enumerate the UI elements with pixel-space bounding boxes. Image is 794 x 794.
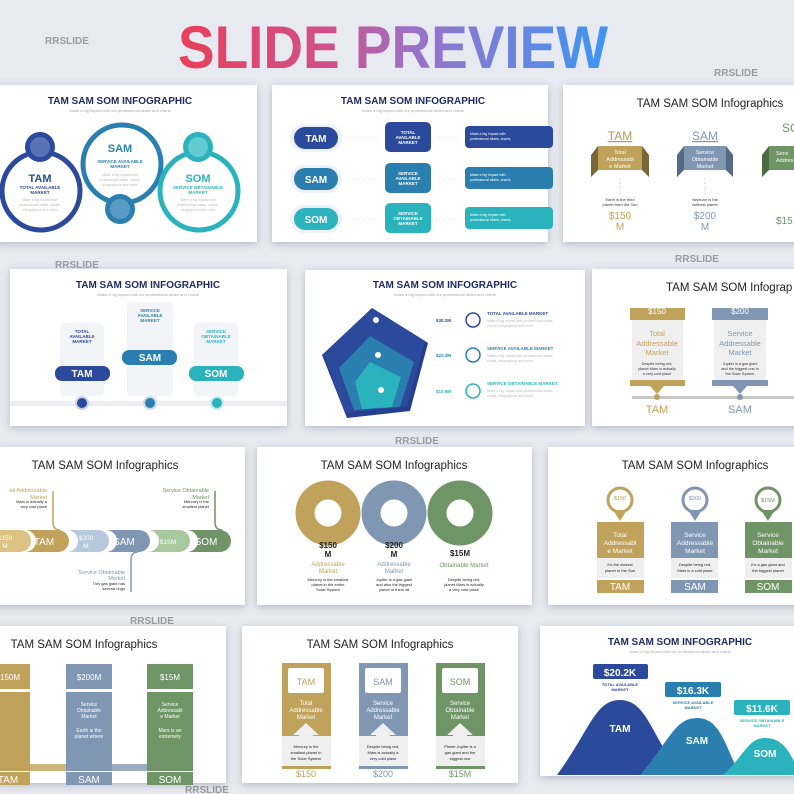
- slide J: columns: $15M: [160, 673, 180, 682]
- slide A: circles: professional slides, charts,: [177, 203, 219, 207]
- slide K: arrow columns: TAM: [297, 677, 315, 687]
- slide K: arrow columns: Planet Jupiter is a: [444, 744, 477, 749]
- slide I: pins: planet to the Sun: [605, 568, 635, 573]
- slide A: circles: infographics and more: [181, 208, 215, 212]
- slide A: circles: SAM: [108, 143, 132, 155]
- slide H: donuts: a very cold place: [449, 587, 480, 592]
- slide K: arrow columns: Obtainable: [445, 708, 475, 714]
- slide H: donuts: TA: [324, 506, 333, 513]
- watermarks: RRSLIDE: [714, 68, 758, 79]
- slide B: rows: Make a big impact with: [470, 132, 506, 136]
- slide A: circles: MARKET: [188, 190, 208, 195]
- slide L: mountains: MARKET: [684, 705, 702, 710]
- slide K: arrow columns: Addressable: [289, 708, 323, 714]
- slide G: chevrons: [0, 447, 245, 605]
- slide J: columns: SOM: [159, 775, 181, 786]
- slide A: circles: —: [38, 185, 42, 189]
- slide H: donuts: SO: [455, 506, 465, 513]
- slide K: arrow columns: Service: [373, 701, 394, 707]
- slide E: pentagon: TOTAL AVAILABLE MARKET: [487, 311, 548, 316]
- slide E: pentagon: Make a big impact with professional slides,: [487, 354, 553, 358]
- slide G: chevrons: Market: [108, 576, 125, 582]
- slide L: mountains: SERVICE AVAILABLE: [673, 700, 714, 705]
- slide K: arrow columns: Mars is actually a: [368, 750, 399, 755]
- slide C: ribbons: $15: [776, 216, 793, 227]
- slide I: pins: SOM: [757, 582, 779, 593]
- slide G: chevrons: $15M: [160, 539, 176, 546]
- slide B: rows: MARKET: [398, 181, 418, 186]
- slide D: cards timeline: MARKET: [72, 339, 92, 344]
- slide K: arrow columns: Addressable: [366, 708, 400, 714]
- slide H: donuts: and also the biggest: [376, 582, 413, 587]
- slide L: mountains: TAM SAM SOM INFOGRAPHIC: [608, 637, 752, 648]
- slide D: cards timeline: TAM: [72, 369, 92, 380]
- slide J: columns: e Market: [160, 714, 180, 720]
- slide E: pentagon: [305, 270, 585, 426]
- slide H: donuts: planet of them all: [379, 587, 409, 592]
- slide I: pins: Market: [758, 548, 778, 555]
- slide H: donuts: M: [391, 550, 398, 559]
- slide L: mountains: MARKET: [753, 723, 771, 728]
- slide D: cards timeline: TAM SAM SOM INFOGRAPHIC: [76, 280, 220, 291]
- slide G: chevrons: Service Obtainable: [163, 488, 209, 494]
- slide B: rows: Make a big impact with: [470, 173, 506, 177]
- slide D: cards timeline: SERVICE: [206, 329, 226, 334]
- slide C: ribbons: $200: [694, 211, 717, 222]
- slide G: chevrons: Mercury is the: [184, 499, 210, 504]
- slide A: circles: Make a big impact with: [22, 198, 58, 202]
- slide H: donuts: M: [457, 514, 463, 521]
- slide E: pentagon: $30.2M: [436, 318, 451, 323]
- slide H: donuts: Despite being red,: [448, 577, 480, 582]
- slide L: mountains: SAM: [686, 736, 708, 747]
- slide K: arrow columns: the Solar System: [291, 756, 322, 761]
- slide C: ribbons: M: [701, 222, 709, 233]
- slide L: mountains: TAM: [610, 724, 630, 735]
- slide K: arrow columns: Market: [297, 715, 315, 721]
- slide B: rows: AVAILABLE: [395, 176, 421, 181]
- slide H: donuts: Addressable: [311, 562, 345, 568]
- slide H: donuts: Solar System: [316, 587, 341, 592]
- slide I: pins: SAM: [684, 582, 706, 593]
- slide I: pins: Mars is a cold place: [677, 568, 713, 573]
- slide E: pentagon: SERVICE AVAILABLE MARKET: [487, 346, 554, 351]
- title: SLIDE PREVIEW: [178, 14, 608, 81]
- slide F: pointer cards: [592, 269, 794, 426]
- slide K: arrow columns: $15M: [449, 769, 471, 779]
- slide I: pins: Despite being red,: [679, 562, 711, 567]
- slide A: circles: TAM: [28, 173, 52, 185]
- slide K: arrow columns: $150: [296, 769, 316, 779]
- slide E: pentagon: Make a big impact with our professional slides and charts: [394, 292, 496, 297]
- slide C: ribbons: Earth is the third: [605, 197, 635, 202]
- slide A: circles: Make a big impact with: [102, 173, 138, 177]
- slide J: columns: extremely: [159, 734, 181, 740]
- slide C: ribbons: Addres: [776, 158, 794, 164]
- slide F: pointer cards: Market: [646, 348, 669, 357]
- slide B: rows: AVAILABLE: [395, 135, 421, 140]
- slide H: donuts: Jupiter is a gas giant: [376, 577, 413, 582]
- slide H: donuts: TAM SAM SOM Infographics: [321, 460, 468, 472]
- watermarks: RRSLIDE: [130, 616, 174, 627]
- slide J: columns: Mars is an: [158, 728, 182, 734]
- slide E: pentagon: Make a big impact with professional slides,: [487, 389, 553, 393]
- slide A: circles: SERVICE OBTAINABLE: [173, 185, 223, 190]
- slide I: pins: e Market: [607, 548, 633, 555]
- slide F: pointer cards: SAM: [728, 404, 752, 416]
- slide I: pins: TAM: [610, 582, 630, 593]
- slide J: columns: TAM SAM SOM Infographics: [11, 639, 158, 651]
- slide K: arrow columns: Despite being red,: [367, 744, 399, 749]
- slide C: ribbons: SAM: [692, 129, 718, 143]
- slide F: pointer cards: TAM SAM SOM Infograp: [666, 282, 792, 294]
- slide K: arrow columns: biggest one: [450, 756, 471, 761]
- slide B: rows: SOM: [305, 215, 327, 226]
- slide H: donuts: $15M: [450, 549, 470, 558]
- slide G: chevrons: This gas giant has: [93, 581, 125, 586]
- slide G: chevrons: Market: [192, 495, 209, 501]
- slide F: pointer cards: Market: [729, 348, 752, 357]
- slide A: circles: infographics and more: [23, 208, 57, 212]
- slide L: mountains: $16.3K: [677, 686, 710, 697]
- slide C: ribbons: Obtainable: [692, 157, 718, 163]
- slide J: columns: 150M: [0, 673, 20, 682]
- slide D: cards timeline: OBTAINABLE: [201, 334, 231, 339]
- slide E: pentagon: SERVICE OBTAINABLE MARKET: [487, 381, 558, 386]
- slide G: chevrons: Service Obtainable: [79, 570, 125, 576]
- slide G: chevrons: several rings: [102, 586, 125, 591]
- slide A: circles: professional slides, charts,: [99, 178, 141, 182]
- slide F: pointer cards: $150: [648, 307, 666, 316]
- slide B: rows: OBTAINABLE: [393, 216, 423, 221]
- slide I: pins: Service: [684, 532, 706, 539]
- slide C: ribbons: M: [616, 222, 624, 233]
- slide B: rows: professional slides, charts,: [470, 137, 511, 141]
- slide L: mountains: [540, 626, 794, 776]
- slide B: rows: SAM: [305, 175, 327, 186]
- slide I: pins: Service: [757, 532, 779, 539]
- slide B: rows: SERVICE: [398, 171, 418, 176]
- slide E: pentagon: TAM SAM SOM INFOGRAPHIC: [373, 280, 517, 291]
- slide B: rows: MARKET: [398, 221, 418, 226]
- slide J: columns: [0, 626, 226, 786]
- watermarks: RRSLIDE: [55, 260, 99, 271]
- slide G: chevrons: Mars is actually a: [16, 499, 48, 504]
- slide I: pins: Addressabl: [604, 540, 637, 547]
- slide J: columns: Market: [81, 714, 97, 720]
- slide B: rows: TAM: [306, 134, 326, 145]
- slide D: cards timeline: SERVICE: [140, 308, 160, 313]
- slide F: pointer cards: Addressable: [636, 339, 678, 348]
- slide B: rows: SERVICE: [398, 211, 418, 216]
- slide B: rows: Make a big impact with: [470, 213, 506, 217]
- slide K: arrow columns: SAM: [373, 677, 393, 687]
- slide H: donuts: planet in the entire: [312, 582, 345, 587]
- slide D: cards timeline: SOM: [205, 369, 227, 380]
- slide K: arrow columns: Total: [300, 701, 312, 707]
- slide I: pins: $15M: [761, 498, 775, 504]
- slide C: ribbons: farthest planet: [692, 202, 719, 207]
- slide G: chevrons: tal Addressable: [9, 488, 47, 494]
- slide K: arrow columns: Market: [374, 715, 392, 721]
- slide F: pointer cards: TAM: [646, 404, 668, 416]
- slide H: donuts: $200: [385, 541, 403, 550]
- slide K: arrow columns: Market: [451, 715, 469, 721]
- slide H: donuts: Market: [385, 569, 403, 575]
- slide I: pins: [548, 447, 794, 605]
- slide A: circles: SOM: [185, 173, 211, 185]
- slide F: pointer cards: Addressable: [719, 339, 761, 348]
- watermarks: RRSLIDE: [395, 436, 439, 447]
- slide A: circles: professional slides, charts,: [19, 203, 61, 207]
- slide D: cards timeline: MARKET: [140, 318, 160, 323]
- slide F: pointer cards: Despite being red,: [642, 362, 672, 366]
- slide L: mountains: SOM: [754, 749, 776, 760]
- slide B: rows: professional slides, charts,: [470, 218, 511, 222]
- slide F: pointer cards: Jupiter is a gas giant: [723, 362, 758, 366]
- slide I: pins: Obtainable: [752, 540, 784, 547]
- slide H: donuts: M: [325, 514, 331, 521]
- slide A: circles: [0, 85, 257, 242]
- slide D: cards timeline: [10, 269, 287, 426]
- slide E: pentagon: charts, infographics and more: [487, 359, 533, 363]
- slide G: chevrons: M: [83, 543, 89, 550]
- slide I: pins: $150: [614, 496, 626, 502]
- slide F: pointer cards: Service: [727, 329, 753, 338]
- slide L: mountains: TOTAL AVAILABLE: [602, 682, 638, 687]
- slide A: circles: MARKET: [30, 190, 50, 195]
- slide H: donuts: Mercury is the smallest: [308, 577, 349, 582]
- slide G: chevrons: SAM: [113, 537, 135, 548]
- slide A: circles: Make a big impact with our professional slides and charts: [69, 108, 171, 113]
- slide I: pins: Addressable: [677, 540, 713, 547]
- slide B: rows: professional slides, charts,: [470, 178, 511, 182]
- slide F: pointer cards: the Solar System: [726, 372, 754, 376]
- slide G: chevrons: SOM: [195, 537, 217, 548]
- slide C: ribbons: Addressabl: [606, 157, 634, 163]
- slide I: pins: $200: [689, 496, 701, 502]
- slide C: ribbons: Neptune is the: [692, 197, 719, 202]
- slide B: rows: TAM SAM SOM INFOGRAPHIC: [341, 96, 485, 107]
- slide B: rows: TOTAL: [401, 130, 416, 135]
- slide A: circles: infographics and more: [103, 183, 137, 187]
- slide E: pentagon: charts, infographics and more: [487, 394, 533, 398]
- slide E: pentagon: charts, infographics and more: [487, 324, 533, 328]
- slide C: ribbons: planet from the Sun: [603, 202, 637, 207]
- slide H: donuts: [257, 447, 532, 605]
- slide K: arrow columns: Service: [450, 701, 471, 707]
- slide D: cards timeline: MARKET: [206, 339, 226, 344]
- slide G: chevrons: TAM: [34, 537, 54, 548]
- slide D: cards timeline: AVAILABLE: [69, 334, 95, 339]
- slide I: pins: the biggest planet: [752, 568, 785, 573]
- slide J: columns: planet where: [75, 734, 104, 740]
- slide K: arrow columns: gas giant and the: [445, 750, 476, 755]
- slide F: pointer cards: and the biggest one in: [721, 367, 759, 371]
- slide K: arrow columns: very cold place: [370, 756, 397, 761]
- slide C: ribbons: $150: [609, 211, 632, 222]
- slide C: ribbons: Servi: [776, 151, 789, 157]
- slide D: cards timeline: SAM: [139, 353, 161, 364]
- slide D: cards timeline: TOTAL: [75, 329, 90, 334]
- slide J: columns: $200M: [77, 673, 102, 682]
- slide H: donuts: Market: [319, 569, 337, 575]
- slide F: pointer cards: planet Mars is actually: [638, 367, 676, 371]
- slide L: mountains: Make a big impact with our professional slides and charts: [629, 649, 731, 654]
- slide K: arrow columns: smallest planet in: [291, 750, 321, 755]
- slide G: chevrons: very cold place: [20, 504, 48, 509]
- slide J: columns: Service: [162, 702, 179, 708]
- slide C: ribbons: [563, 85, 794, 242]
- slide C: ribbons: Market: [697, 164, 714, 170]
- slide K: arrow columns: $200: [373, 769, 393, 779]
- slide J: columns: Obtainable: [77, 708, 101, 714]
- slide G: chevrons: TAM SAM SOM Infographics: [32, 460, 179, 472]
- slide I: pins: It's a gas giant and: [751, 562, 785, 567]
- slide K: arrow columns: Mercury is the: [293, 744, 319, 749]
- slide A: circles: TAM SAM SOM INFOGRAPHIC: [48, 96, 192, 107]
- slide G: chevrons: M: [2, 543, 8, 550]
- slide K: arrow columns: SOM: [450, 677, 470, 687]
- slide C: ribbons: Service: [696, 150, 714, 156]
- slide A: circles: TOTAL AVAILABLE: [20, 185, 60, 190]
- slide I: pins: Total: [613, 532, 627, 539]
- slide J: columns: Addressabl: [157, 708, 183, 714]
- slide L: mountains: $11.6K: [746, 704, 779, 715]
- slide J: columns: Service: [81, 702, 98, 708]
- slide C: ribbons: TAM SAM SOM Infographics: [637, 98, 784, 110]
- slide F: pointer cards: Total: [649, 329, 665, 338]
- slide H: donuts: Addressable: [377, 562, 411, 568]
- slide B: rows: MARKET: [398, 140, 418, 145]
- slide K: arrow columns: TAM SAM SOM Infographics: [307, 639, 454, 651]
- slide D: cards timeline: Make a big impact with our professional slides and charts: [97, 292, 199, 297]
- slide E: pentagon: $10.6M: [436, 389, 451, 394]
- slide I: pins: TAM SAM SOM Infographics: [622, 460, 769, 472]
- slide A: circles: MARKET: [110, 164, 130, 169]
- slide J: columns: SAM: [78, 775, 100, 786]
- slide F: pointer cards: $200: [731, 307, 749, 316]
- slide H: donuts: M: [325, 550, 332, 559]
- slide C: ribbons: TAM: [608, 129, 632, 143]
- slide H: donuts: planet Mars is actually: [444, 582, 484, 587]
- slide A: circles: Make a big impact with: [180, 198, 216, 202]
- watermarks: RRSLIDE: [45, 36, 89, 47]
- slide H: donuts: $150: [319, 541, 337, 550]
- watermarks: RRSLIDE: [675, 254, 719, 265]
- slide L: mountains: MARKET: [611, 687, 629, 692]
- slide I: pins: Market: [685, 548, 705, 555]
- slide L: mountains: SERVICE OBTAINABLE: [740, 718, 785, 723]
- slide J: columns: Earth is the: [76, 728, 102, 734]
- slide B: rows: Make a big impact with our professional slides and charts: [362, 108, 464, 113]
- slide G: chevrons: smallest planet: [182, 504, 210, 509]
- slide E: pentagon: Make a big impact with professional slides,: [487, 319, 553, 323]
- slide C: ribbons: e Market: [609, 164, 631, 170]
- slide I: pins: It's the closest: [607, 562, 633, 567]
- slide H: donuts: M: [391, 514, 397, 521]
- slide K: arrow columns: [242, 626, 518, 783]
- slide H: donuts: Obtainable Market: [439, 563, 489, 569]
- slide F: pointer cards: a very cold place: [643, 372, 671, 376]
- slide A: circles: SERVICE AVAILABLE: [97, 159, 143, 164]
- slide L: mountains: $20.2K: [604, 668, 637, 679]
- slide E: pentagon: $22.3M: [436, 353, 451, 358]
- slide D: cards timeline: AVAILABLE: [137, 313, 163, 318]
- slide G: chevrons: $200: [79, 535, 94, 542]
- slide C: ribbons: Total: [614, 150, 626, 156]
- slide H: donuts: SA: [390, 506, 399, 513]
- slide B: rows: [272, 85, 553, 242]
- slide G: chevrons: Market: [30, 495, 47, 501]
